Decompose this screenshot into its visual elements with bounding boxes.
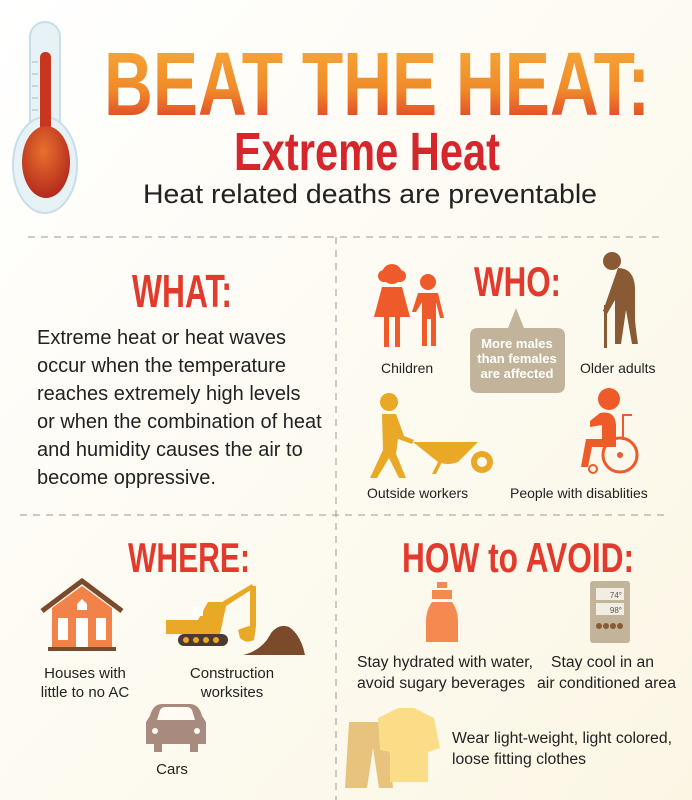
icon: children [374,264,444,347]
label: cars: Cars [156,761,188,778]
icon: thermometer [13,22,77,213]
label: stay cool: air conditioned area [537,675,676,692]
label: people with disabilities: People with disablities [510,485,648,501]
icon: water bottle [426,582,458,642]
callout: males: More males [481,336,553,351]
label: clothes: Wear light-weight, light colored, [452,730,672,747]
label: construction: Construction [190,665,274,682]
label: older adults: Older adults [580,360,655,376]
text block: what description: become oppressive. [37,467,216,489]
panel: where [41,534,305,778]
panel: what [37,265,327,489]
label: hydrated: avoid sugary beverages [357,675,525,692]
text block: what description: reaches extremely high levels [37,383,300,405]
tagline: Heat related deaths are preventable [143,179,597,209]
heading: what: WHAT: [132,265,232,317]
icon: outside worker [370,393,493,478]
label: houses: little to no AC [41,684,129,701]
text block: what description: or when the combination of heat [37,411,322,433]
panel: who [367,252,655,501]
text block: what description: Extreme heat or heat waves [37,327,286,349]
subtitle: Extreme Heat [234,122,500,182]
text block: what description: occur when the temperature [37,355,286,377]
label: clothes: loose fitting clothes [452,751,586,768]
label: children: Children [381,360,433,376]
icon: house [42,581,122,651]
heading: where: WHERE: [128,534,250,581]
label: hydrated: Stay hydrated with water, [357,654,533,671]
text block: what description: and humidity causes the air to [37,439,303,461]
label: stay cool: Stay cool in an [551,654,654,671]
heading: who: WHO: [474,258,561,305]
icon: clothes [345,708,440,788]
callout: males: than females [477,351,557,366]
icon: thermostat [590,581,630,643]
callout: males [470,308,565,393]
label: houses: Houses with [44,665,126,682]
icon: thermostat: 98° [610,606,622,615]
icon: thermostat: 74° [610,591,622,600]
panel: how to avoid [345,534,676,788]
callout: males: are affected [481,366,554,381]
label: outside workers: Outside workers [367,485,468,501]
label: construction: worksites [200,684,263,701]
icon: wheelchair [581,388,637,473]
icon: excavator [166,584,305,655]
icon: older adult [603,252,638,348]
icon: car [146,704,206,752]
